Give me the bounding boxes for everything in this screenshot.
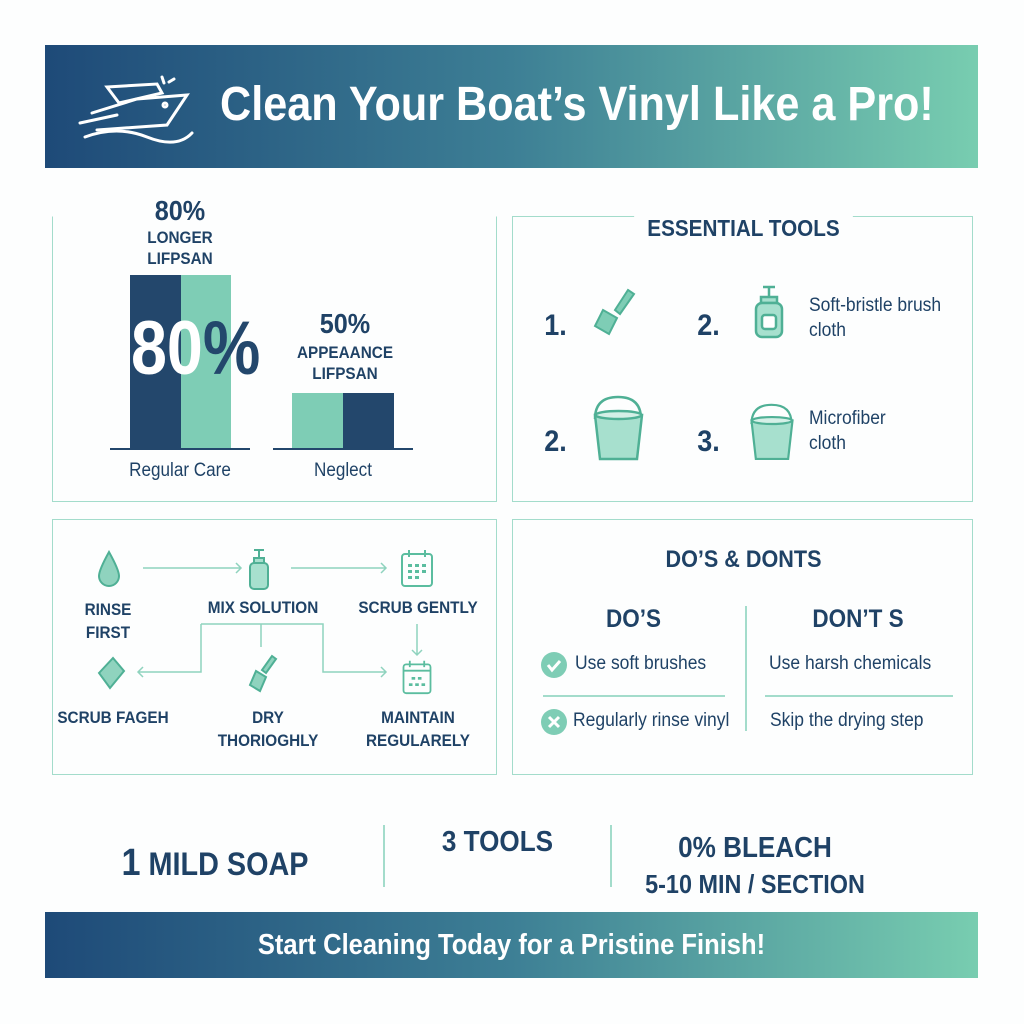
column: dos: Regularly rinse vinyl — [573, 710, 729, 731]
icon: soap bottle — [249, 549, 269, 590]
heading: DO’S & DONTS — [665, 546, 822, 573]
bar chart: APPEAANCE — [297, 343, 393, 362]
icon: check — [541, 652, 567, 678]
bar chart: 50% — [320, 308, 370, 339]
icon: bucket — [594, 396, 644, 460]
icon: calendar 2 — [402, 660, 432, 694]
panel: essential tools: Microfiber — [809, 408, 886, 429]
title: Clean Your Boat’s Vinyl Like a Pro! — [220, 78, 934, 131]
panel: process steps: DRY — [252, 708, 284, 727]
stats row — [121, 825, 865, 899]
icon: brush — [248, 654, 278, 692]
panel: process steps: SCRUB FAGEH — [57, 708, 169, 727]
icon: bottle — [754, 286, 784, 338]
panel: process steps: SCRUB GENTLY — [358, 598, 478, 617]
bar chart: LIFPSAN — [312, 364, 378, 383]
panel: process steps: THORIOGHLY — [218, 731, 318, 750]
column: donts: Skip the drying step — [770, 710, 924, 731]
panel: process steps: FIRST — [86, 623, 130, 642]
panel: process steps: MAINTAIN — [381, 708, 455, 727]
header banner — [45, 45, 978, 168]
footer banner — [45, 912, 978, 978]
bar chart — [110, 195, 413, 481]
icon: cross — [541, 709, 567, 735]
panel: process steps: RINSE — [85, 600, 131, 619]
icon: boat — [78, 76, 194, 144]
bar chart: LONGER — [147, 228, 213, 247]
column: donts — [765, 605, 953, 731]
panel: essential tools: cloth — [809, 320, 846, 341]
column: donts: DON’T S — [812, 605, 904, 633]
panel: essential tools: cloth — [809, 433, 846, 454]
footer text: Start Cleaning Today for a Pristine Finish! — [258, 929, 765, 961]
panel: essential tools — [512, 216, 973, 502]
icon: calendar — [401, 550, 433, 587]
stat: mild soap: 1 MILD SOAP — [121, 842, 309, 884]
bar chart: 80% — [155, 195, 205, 226]
panel: essential tools: 1. — [544, 309, 567, 342]
panel: essential tools: 2. — [544, 425, 567, 458]
icon: sponge — [98, 656, 126, 690]
stat: bleach: 5-10 MIN / SECTION — [645, 869, 865, 899]
column: donts: Use harsh chemicals — [769, 653, 931, 674]
stat: bleach: 0% BLEACH — [678, 832, 832, 864]
heading: ESSENTIAL TOOLS — [647, 215, 840, 241]
panel: process steps: MIX SOLUTION — [208, 598, 318, 617]
panel: essential tools: Soft-bristle brush — [809, 295, 941, 316]
stat: bleach — [645, 832, 865, 899]
bar chart: 80% — [131, 306, 260, 391]
column: dos: Use soft brushes — [575, 653, 706, 674]
panel: process steps — [52, 519, 497, 775]
column: dos: DO’S — [606, 605, 661, 633]
panel: essential tools: 3. — [697, 425, 720, 458]
bar chart: LIFPSAN — [147, 249, 213, 268]
column: dos — [541, 605, 729, 735]
stat: tools: 3 TOOLS — [442, 826, 553, 858]
arrows — [137, 562, 422, 678]
icon: drop — [98, 550, 120, 587]
icon: bucket 2 — [750, 404, 794, 460]
panel: lifespan chart — [52, 216, 497, 502]
panel: essential tools: 2. — [697, 309, 720, 342]
icon: brush — [594, 288, 636, 336]
panel: dos and donts — [512, 519, 973, 775]
bar chart: Regular Care — [129, 460, 231, 481]
bar chart: Neglect — [314, 460, 372, 481]
panel: process steps: REGULARELY — [366, 731, 470, 750]
